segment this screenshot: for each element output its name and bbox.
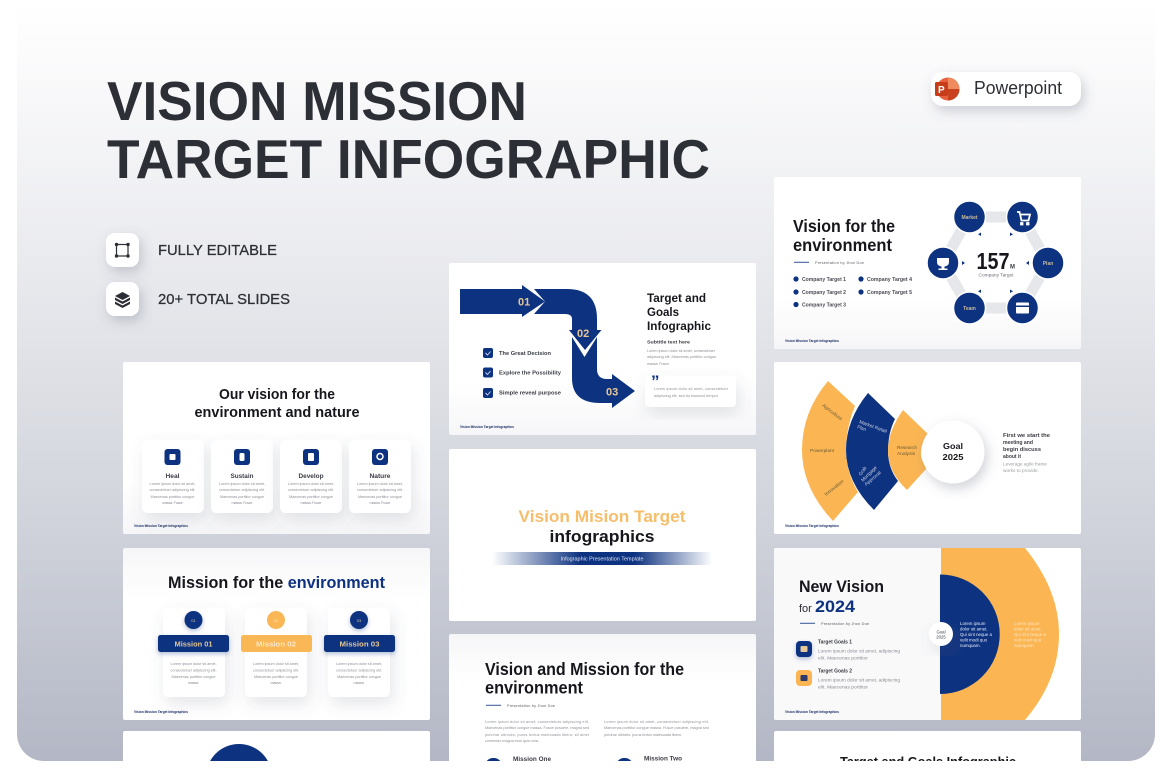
- inner circle text: dolor sit amet.: [960, 626, 988, 632]
- icon: layers: [115, 292, 130, 308]
- slide heading: Our vision for the: [219, 386, 335, 403]
- target goal 1: [796, 640, 901, 660]
- company target list: Company Target 1: [802, 277, 846, 283]
- target goal 2: Lorem ipsum dolor sit amet, adipiscing: [818, 678, 901, 682]
- card: sustain: Lorem ipsum dolor sit amet,: [219, 482, 265, 486]
- presenter line: Presentation by Jhon Doe: [815, 261, 864, 265]
- slide heading: [485, 662, 684, 694]
- company target list: Company Target 5: [867, 290, 912, 296]
- slide heading: environment: [793, 235, 892, 255]
- wedge chart: [802, 381, 928, 521]
- feature: total slides: 20+ TOTAL SLIDES: [158, 291, 290, 308]
- card: sustain: [211, 440, 273, 513]
- feature: fully editable: FULLY EDITABLE: [158, 242, 277, 259]
- card: develop: consectetuer adipiscing elit.: [288, 488, 334, 492]
- heading: 2024: [815, 597, 856, 616]
- slide thumbnails: [123, 177, 1081, 780]
- feature: fully editable: [106, 233, 277, 267]
- company target list: Company Target 3: [802, 302, 846, 308]
- hub value: Company Target: [978, 272, 1014, 278]
- slide: target and goals: Target and Goals Infographic: [840, 754, 1016, 769]
- goal description: works to provide.: [1003, 468, 1039, 473]
- mission two: Mission Two: [644, 756, 682, 762]
- slide heading: Vision and Mission for the: [485, 659, 684, 679]
- card: mission 02: Mission 02: [256, 640, 296, 648]
- hub diagram: [927, 201, 1064, 324]
- checklist: Explore the Possibility: [499, 370, 562, 376]
- text column two: Lorem ipsum dolor sit amet, consectetuer adipiscing elit.: [604, 720, 709, 724]
- outer arc text: numquam.: [1014, 643, 1035, 648]
- powerpoint badge: [931, 72, 1081, 106]
- card: mission 03: Maecenas porttitor congue: [337, 675, 381, 679]
- slide: target and goals: [774, 731, 1081, 780]
- card: mission 02: consectetuer adipiscing elit.: [253, 668, 299, 672]
- outer arc text: [1014, 621, 1047, 648]
- card: mission 01: consectetuer adipiscing elit.: [170, 668, 216, 672]
- text column two: Maecenas porttitor congue massa. Fusce posuere, magna sed: [604, 726, 709, 730]
- card: mission 01: Maecenas porttitor congue: [172, 675, 216, 679]
- slide heading: [793, 216, 895, 255]
- checklist: [483, 348, 562, 398]
- card: sustain: consectetuer adipiscing elit.: [219, 488, 265, 492]
- card: mission 03: Lorem ipsum dolor sit amet,: [336, 662, 382, 666]
- slide heading: Vision for the: [793, 216, 895, 236]
- card: develop: Lorem ipsum dolor sit amet,: [288, 482, 334, 486]
- card: sustain: Sustain: [230, 473, 254, 480]
- outer arc text: Lorem ipsum: [1014, 621, 1040, 626]
- subtitle text: [647, 340, 716, 366]
- main title: TARGET INFOGRAPHIC: [107, 128, 710, 190]
- card: mission 01: Mission 01: [174, 640, 212, 648]
- checklist: Simple reveal purpose: [499, 390, 561, 396]
- slide heading: environment: [485, 678, 583, 698]
- slide: cover: [449, 449, 756, 621]
- icon: trophy: [937, 258, 949, 270]
- card: mission 02: Maecenas porttitor congue: [254, 675, 298, 679]
- text column one: pulvinar ultricies, purus lectus malesuada libero, sit amet: [485, 733, 590, 737]
- icon: cart: [1017, 212, 1030, 224]
- card: nature: Maecenas porttitor congue: [358, 495, 402, 499]
- quote card: adipiscing elit, sed do eiusmod tempor: [654, 394, 719, 398]
- cover title: infographics: [550, 527, 654, 546]
- arrow graphic: 01: [518, 296, 530, 308]
- text column one: [485, 720, 590, 743]
- icon: powerpoint logo: P: [938, 85, 945, 96]
- card: mission 03: consectetuer adipiscing elit.: [336, 668, 382, 672]
- target goal 2: [796, 668, 901, 690]
- card: nature: Nature: [370, 473, 391, 480]
- text column two: pulvinar ultricies, purus lectus malesuada libero.: [604, 733, 682, 737]
- hub value: M: [1010, 264, 1015, 270]
- wedge chart: Research: [897, 445, 917, 451]
- card: heal: Maecenas porttitor congue: [150, 495, 194, 499]
- target goal 1: Target Goals 1: [818, 640, 852, 646]
- wedge chart: Market Retail: [858, 419, 888, 435]
- slide footer: Vision Mission Target Infographics: [134, 524, 188, 528]
- goal circle: Goal: [943, 441, 963, 451]
- target goal 1: Lorem ipsum dolor sit amet, adipiscing: [818, 648, 901, 654]
- heading: New Vision: [799, 577, 884, 596]
- slide: mission: [123, 548, 430, 720]
- wedge chart: Grab: [858, 465, 869, 477]
- card: nature: massa. Fusce: [370, 501, 390, 505]
- wedge chart: Innovation: [824, 478, 846, 498]
- heading: for: [799, 603, 812, 615]
- slide heading: Goals: [647, 305, 679, 319]
- wedge chart: Analysis: [897, 451, 916, 457]
- goal description: First we start the: [1003, 433, 1050, 439]
- goal circle: [922, 420, 984, 484]
- arrow graphic: 02: [577, 328, 589, 340]
- goal description: begin discuss: [1003, 447, 1041, 453]
- wedge chart: Agriculture: [821, 403, 844, 423]
- card: mission 03: 03: [357, 618, 362, 623]
- cover title: [518, 507, 686, 546]
- outer arc text: velit modi quo: [1014, 638, 1042, 642]
- card: develop: Develop: [298, 473, 324, 480]
- card: sustain: Maecenas porttitor congue: [220, 495, 264, 499]
- slide heading: Mission for the environment: [168, 574, 385, 592]
- outer arc text: Qui sint neque a: [1014, 632, 1047, 637]
- presenter line: Presentation by Jhon Doe: [507, 704, 555, 708]
- icon: powerpoint logo: [935, 78, 960, 100]
- slide footer: Vision Mission Target Infographics: [460, 425, 514, 429]
- card: mission 03: massa.: [354, 681, 365, 685]
- inner circle text: Lorem ipsum: [960, 621, 986, 626]
- card: mission 02: Lorem ipsum dolor sit amet,: [253, 662, 299, 666]
- goal circle: 2025: [942, 452, 964, 462]
- goal description: [1003, 433, 1050, 473]
- inner circle text: [960, 621, 993, 648]
- outer arc text: dolor sit amet.: [1014, 626, 1042, 632]
- card: mission 02: 02: [274, 618, 279, 623]
- gradient band: Infographic Presentation Template: [560, 556, 644, 562]
- card: develop: [280, 440, 342, 513]
- mission one: Mission One: [513, 756, 552, 763]
- text column one: commodo magna eros quis urna.: [485, 739, 539, 743]
- card: heal: Lorem ipsum dolor sit amet,: [150, 482, 196, 486]
- hub value: 157: [976, 248, 1010, 274]
- card: mission 01: [158, 608, 229, 697]
- main title: [107, 82, 708, 178]
- slide footer: Vision Mission Target Infographics: [785, 524, 839, 528]
- arrow graphic: [460, 285, 635, 408]
- quote card: Lorem ipsum dolor sit amet, consectetuer: [654, 387, 729, 391]
- icon: selection square: [115, 243, 130, 258]
- card: mission 01: massa.: [188, 681, 199, 685]
- arrow graphic: 03: [606, 386, 618, 398]
- slide heading: [647, 291, 711, 333]
- powerpoint badge: Powerpoint: [974, 78, 1062, 98]
- subtitle text: Lorem ipsum dolor sit amet, consectetuer: [647, 349, 716, 353]
- slide: our vision: [123, 362, 430, 534]
- card: mission 02: massa.: [270, 681, 282, 685]
- goal badge: Goal: [936, 630, 946, 634]
- card: nature: consectetuer adipiscing elit.: [357, 488, 403, 492]
- card: nature: Lorem ipsum dolor sit amet,: [357, 482, 403, 486]
- card: sustain: massa. Fusce: [232, 501, 252, 505]
- inner circle text: velit modi quo: [960, 638, 988, 642]
- target goal 2: elit. Maecenas porttitor: [818, 684, 869, 690]
- wedge chart: Mortgage: [860, 465, 879, 483]
- half circles: [940, 548, 1059, 720]
- card: mission 03: Mission 03: [340, 640, 380, 648]
- slide: vision and mission: [449, 634, 756, 780]
- quote card: [645, 372, 736, 407]
- presenter line: [800, 622, 869, 626]
- checklist: The Great Decision: [499, 351, 552, 357]
- node labels: Plan: [1043, 261, 1053, 267]
- inner circle text: numquam.: [960, 643, 981, 648]
- node labels: Team: [963, 306, 976, 312]
- card: develop: Maecenas porttitor congue: [289, 495, 333, 499]
- presenter line: [486, 704, 555, 708]
- goal description: about it: [1003, 454, 1021, 460]
- wedge chart: Approval: [863, 470, 883, 488]
- goal description: meeting and: [1003, 440, 1033, 446]
- card: nature: [349, 440, 411, 513]
- card: mission 01: Lorem ipsum dolor sit amet,: [170, 662, 216, 666]
- card: mission 01: 01: [191, 618, 196, 623]
- presenter line: Presentation by Jhon Doe: [821, 622, 869, 626]
- target goal 1: elit. Maecenas porttitor: [818, 656, 869, 660]
- feature: total slides: [106, 282, 290, 316]
- company target list: Company Target 4: [867, 277, 912, 283]
- slide footer: Vision Mission Target Infographics: [134, 710, 188, 714]
- slide: cropped circle: [123, 731, 430, 780]
- goal description: Leverage agile frame: [1003, 462, 1048, 466]
- card: heal: Heal: [166, 473, 180, 480]
- heading: [799, 577, 884, 616]
- company target list: [793, 276, 912, 308]
- slide heading: Target and: [647, 291, 706, 305]
- card: heal: massa. Fusce: [162, 501, 183, 505]
- text column one: Maecenas porttitor congue massa. Fusce posuere, magna sed: [485, 726, 589, 730]
- text column two: [604, 720, 709, 737]
- quote card: ”: [651, 372, 660, 391]
- slide footer: Vision Mission Target Infographics: [785, 710, 839, 714]
- slide heading: Infographic: [647, 319, 711, 333]
- subtitle text: Subtitle text here: [647, 340, 690, 346]
- mission one: [486, 756, 551, 761]
- slide footer: Vision Mission Target Infographics: [785, 339, 839, 343]
- icon: wallet card: [1016, 302, 1029, 314]
- company target list: Company Target 2: [802, 290, 846, 296]
- cover title: Vision Mision Target: [518, 507, 686, 526]
- slide heading: environment and nature: [194, 404, 360, 421]
- slide: target and goals arrow: [449, 263, 756, 435]
- gradient band: [492, 552, 712, 565]
- wedge chart: Plan: [856, 424, 867, 433]
- card: mission 02: [241, 608, 312, 697]
- slide: vision hub: [774, 177, 1081, 349]
- goal badge: 2025: [936, 634, 946, 640]
- slide heading: [195, 388, 360, 417]
- card: mission 03: [324, 608, 395, 697]
- subtitle text: massa. Fusce: [647, 362, 669, 366]
- goal badge: [929, 622, 953, 646]
- node labels: Market: [961, 215, 978, 221]
- subtitle text: adipiscing elit. Maecenas porttitor congue: [647, 355, 716, 359]
- card: heal: [142, 440, 204, 513]
- wedge chart: Powerplant: [810, 448, 835, 454]
- text column one: Lorem ipsum dolor sit amet, consectetuer adipiscing elit.: [485, 720, 589, 724]
- card: develop: massa. Fusce: [300, 501, 322, 505]
- main title: VISION MISSION: [107, 70, 527, 132]
- slide: goal 2025: [774, 362, 1081, 534]
- slide: new vision: [774, 548, 1081, 720]
- inner circle text: Qui sint neque a: [960, 632, 993, 637]
- target goal 2: Target Goals 2: [818, 668, 852, 674]
- mission two: [616, 756, 682, 775]
- node labels: [961, 215, 1053, 312]
- card: heal: consectetuer adipiscing elit.: [150, 488, 196, 492]
